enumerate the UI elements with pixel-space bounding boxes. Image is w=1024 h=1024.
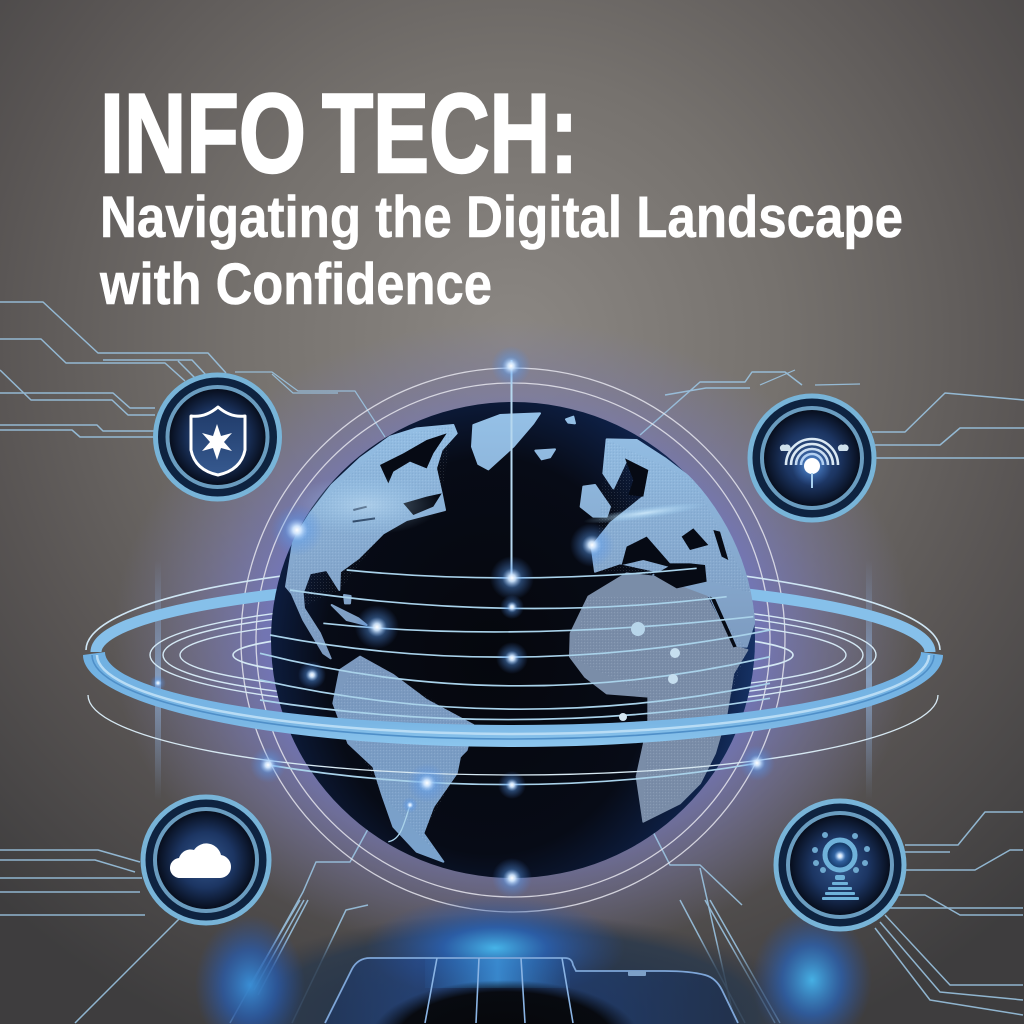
device chip xyxy=(628,971,646,976)
icon: cloud badge xyxy=(143,797,269,923)
Caribbean islands xyxy=(332,595,367,625)
globe sphere xyxy=(271,402,755,878)
wifi point xyxy=(792,446,832,486)
device dividers xyxy=(425,958,573,1023)
Scandinavia and Asia xyxy=(592,439,755,647)
star xyxy=(202,424,232,460)
dark seas xyxy=(380,433,737,647)
British Isles xyxy=(581,485,610,517)
bulb ring xyxy=(825,840,855,870)
ring: back half and thin inner orbits xyxy=(86,562,940,710)
dark strokes xyxy=(353,507,375,522)
orbit circles xyxy=(241,368,785,912)
globe xyxy=(260,402,770,878)
North America xyxy=(286,425,457,658)
ring highlights xyxy=(92,655,934,739)
Greenland xyxy=(472,413,540,469)
bulb core xyxy=(827,843,853,869)
satellite dots xyxy=(812,832,870,873)
blue glow right xyxy=(752,910,872,1024)
icon: bulb badge xyxy=(776,801,904,929)
lower thin orbit xyxy=(88,695,938,775)
wifi stem xyxy=(811,473,813,488)
vertical light streak right xyxy=(866,560,872,800)
latitude lines xyxy=(260,568,770,842)
centre top glow xyxy=(425,958,570,988)
icon: wifi badge xyxy=(750,396,874,520)
land dot texture xyxy=(286,425,753,862)
device body xyxy=(325,958,738,1024)
subtitle line 1: Navigating the Digital Landscape xyxy=(100,185,903,250)
device shadow xyxy=(200,905,820,1024)
vertical light streak left xyxy=(155,560,161,800)
vertical meridian line xyxy=(510,360,512,578)
small clouds xyxy=(780,444,849,451)
circuit traces xyxy=(0,302,1024,1023)
South America xyxy=(333,657,473,862)
subtitle line 2: with Confidence xyxy=(99,252,492,317)
blue halo behind globe xyxy=(113,320,913,960)
light streak xyxy=(583,498,707,528)
glowing nodes xyxy=(150,346,775,898)
Africa xyxy=(570,573,747,822)
device at bottom xyxy=(195,896,872,1024)
device outline xyxy=(325,958,738,1023)
cloud xyxy=(170,843,231,878)
dark screen xyxy=(370,980,640,1024)
continents xyxy=(286,413,755,862)
ring: front band xyxy=(83,652,943,747)
title xyxy=(100,71,578,196)
highlights on globe xyxy=(290,475,440,535)
wifi arcs xyxy=(786,439,838,465)
land masses xyxy=(286,413,755,862)
Svalbard xyxy=(566,417,575,423)
stepped base xyxy=(822,875,859,900)
blue glow centre xyxy=(365,896,625,1000)
shield outline xyxy=(191,407,245,475)
icon: shield badge xyxy=(156,375,280,499)
blue glow left xyxy=(195,915,305,1024)
title: INFO xyxy=(100,71,306,196)
title: TECH: xyxy=(322,71,578,196)
Iceland xyxy=(535,449,555,459)
